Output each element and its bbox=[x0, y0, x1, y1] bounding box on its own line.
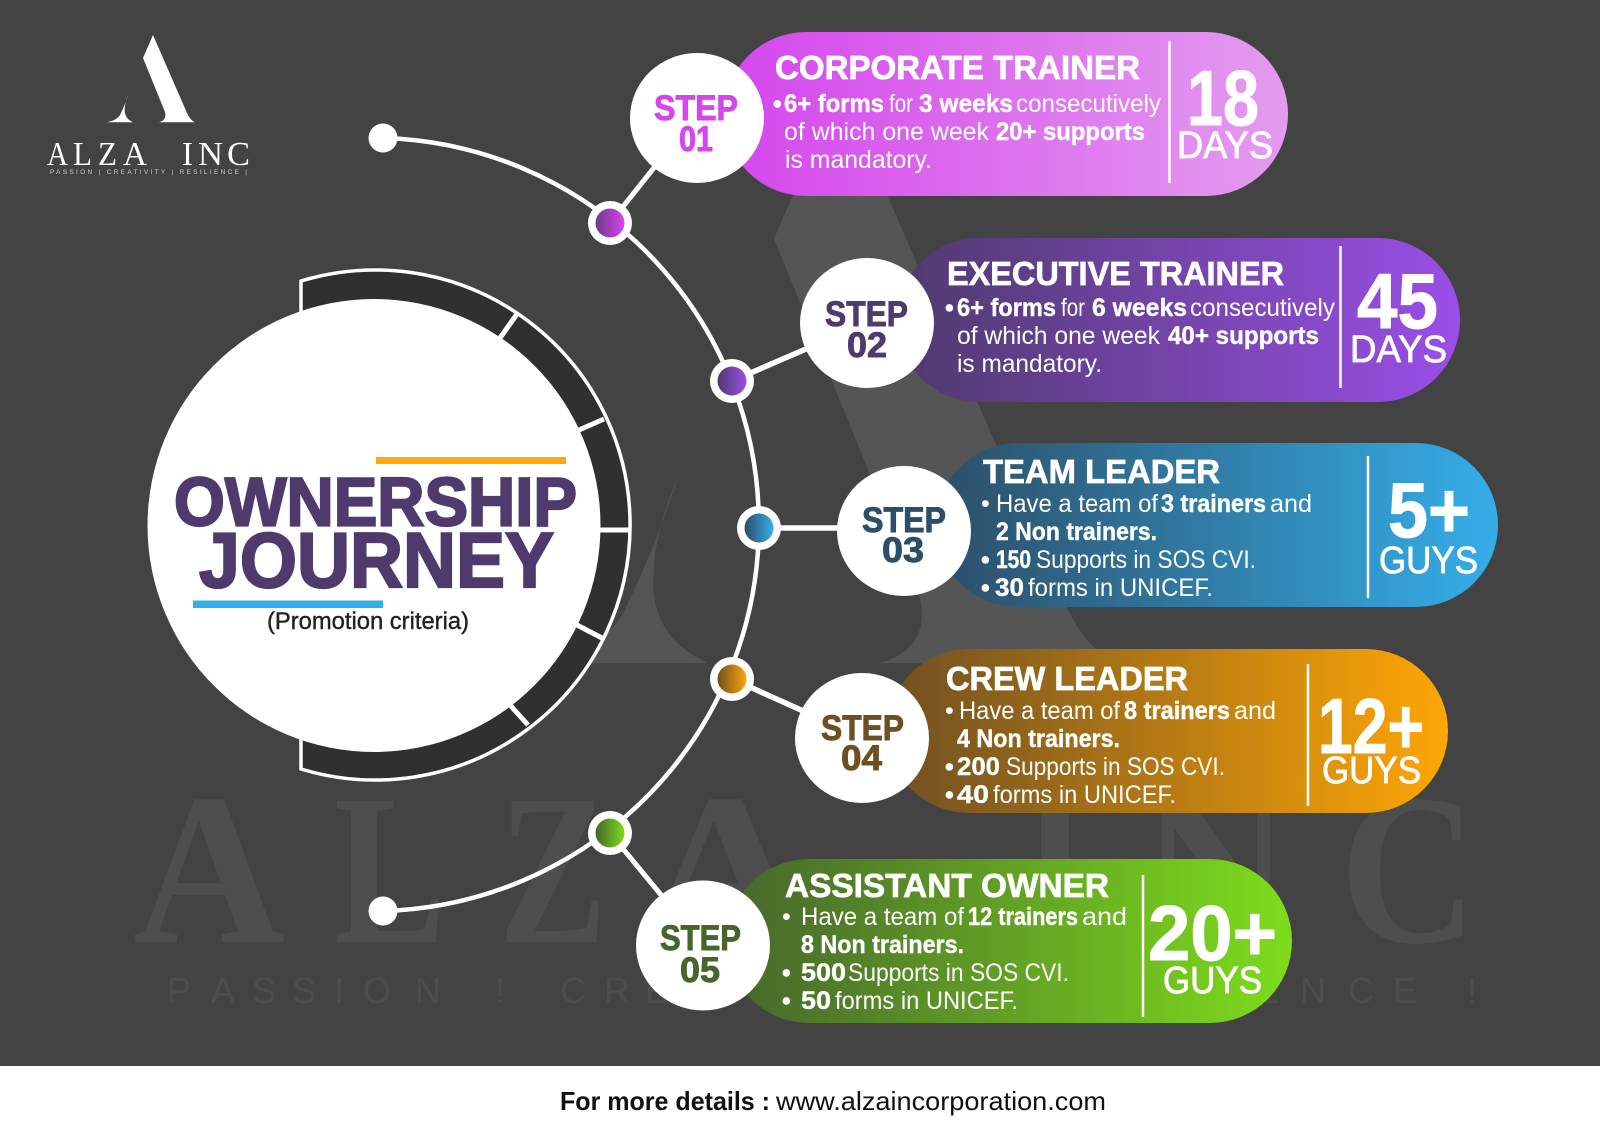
step badge bbox=[630, 53, 764, 183]
criteria text: for bbox=[1061, 294, 1085, 322]
step badge: 04 bbox=[841, 739, 883, 778]
logo: Alza Inc bbox=[47, 35, 250, 176]
criteria text: of which one week bbox=[957, 322, 1160, 350]
accent bar: orange bbox=[376, 457, 566, 464]
step badge: 02 bbox=[847, 326, 887, 365]
criteria text: for bbox=[889, 90, 913, 118]
criteria text: Have a team of bbox=[959, 697, 1120, 725]
logo mark bbox=[107, 35, 195, 122]
metric: 45 days bbox=[1350, 257, 1447, 371]
step badge: STEP bbox=[654, 89, 738, 128]
title: OWNERSHIP bbox=[174, 464, 577, 540]
watermark: tagline: PASSION ! CREATIVITY ! RESILIENCE ! bbox=[167, 970, 1477, 1011]
criteria text: Supports in SOS CVI. bbox=[1006, 753, 1225, 781]
heading: CORPORATE TRAINER bbox=[775, 49, 1140, 86]
criteria text: Supports in SOS CVI. bbox=[848, 959, 1069, 987]
logo wordmark bbox=[47, 136, 250, 173]
criteria text: Have a team of bbox=[996, 490, 1158, 518]
criteria text: 40+ supports bbox=[1168, 322, 1319, 350]
criteria text: 6 weeks bbox=[1092, 294, 1187, 322]
connector: step 2 bbox=[732, 330, 850, 381]
connector: step 3 bbox=[759, 525, 880, 531]
step badge: STEP bbox=[821, 709, 904, 748]
criteria text: and bbox=[1270, 490, 1312, 518]
criteria text: is mandatory. bbox=[785, 146, 932, 174]
divider bbox=[1339, 246, 1342, 388]
node: step 2 bbox=[710, 359, 754, 403]
criteria text: consecutively bbox=[1016, 90, 1161, 118]
metric: 5+ guys: 5+ bbox=[1388, 466, 1470, 554]
metric: 18 days: 18 bbox=[1187, 54, 1259, 142]
watermark: ALZA INC wordmark: N bbox=[1140, 750, 1290, 989]
criteria text: forms in UNICEF. bbox=[835, 987, 1018, 1015]
watermark: ALZA INC wordmark bbox=[133, 750, 1477, 989]
divider bbox=[1367, 456, 1369, 598]
segmented ring around central circle bbox=[301, 270, 630, 780]
criteria text: 30 bbox=[995, 574, 1024, 602]
criteria text: and bbox=[1234, 697, 1276, 725]
heading: TEAM LEADER bbox=[983, 453, 1220, 490]
criteria text: 3 trainers bbox=[1161, 490, 1266, 518]
criteria text: Supports in SOS CVI. bbox=[1036, 546, 1256, 574]
step badge: STEP bbox=[862, 501, 946, 540]
criteria text: is mandatory. bbox=[957, 350, 1102, 378]
pill background bbox=[897, 238, 1460, 402]
criteria text: 40 bbox=[957, 781, 989, 809]
node: step 1 bbox=[588, 201, 632, 245]
criteria text: Have a team of bbox=[801, 903, 964, 931]
criteria text: 150 bbox=[996, 546, 1031, 574]
step badge bbox=[636, 880, 770, 1010]
criteria text: • bbox=[782, 903, 791, 931]
metric: 20+ guys: GUYS bbox=[1163, 960, 1262, 1002]
criteria text: 50 bbox=[801, 987, 831, 1015]
step badge: STEP bbox=[660, 919, 741, 958]
title bbox=[174, 464, 577, 604]
logo wordmark: A bbox=[47, 136, 68, 173]
criteria text bbox=[945, 697, 1276, 809]
heading: CREW LEADER bbox=[946, 660, 1188, 697]
pill background bbox=[936, 443, 1498, 607]
pill background bbox=[887, 649, 1448, 813]
criteria text: • bbox=[981, 546, 990, 574]
connector: step 1 bbox=[610, 135, 680, 223]
criteria text: 6+ forms bbox=[784, 90, 884, 118]
metric: 20+ guys: 20+ bbox=[1148, 889, 1277, 977]
logo wordmark: C bbox=[227, 136, 250, 173]
logo wordmark: Z bbox=[98, 136, 117, 173]
step badge bbox=[837, 466, 971, 596]
criteria text: 12 trainers bbox=[968, 903, 1078, 931]
node: step 5 bbox=[588, 811, 632, 855]
metric: 18 days: DAYS bbox=[1177, 125, 1273, 167]
connector: step 4 bbox=[732, 679, 850, 732]
panel: step 3 team leader bbox=[837, 443, 1498, 607]
title: JOURNEY bbox=[199, 516, 554, 604]
criteria text bbox=[981, 490, 1312, 602]
step badge: STEP bbox=[825, 295, 908, 334]
criteria text: 4 Non trainers. bbox=[957, 725, 1120, 753]
criteria text: and bbox=[1082, 903, 1127, 931]
criteria text: 3 weeks bbox=[919, 90, 1013, 118]
logo wordmark: L bbox=[73, 136, 92, 173]
criteria text: • bbox=[782, 987, 791, 1015]
criteria text: 20+ supports bbox=[996, 118, 1145, 146]
logo tagline: PASSION | CREATIVITY | RESILIENCE | bbox=[50, 169, 247, 176]
criteria text: • bbox=[782, 959, 791, 987]
logo wordmark: I bbox=[182, 136, 193, 173]
metric: 45 days: 45 bbox=[1357, 257, 1438, 345]
criteria text: • bbox=[945, 753, 954, 781]
step badge bbox=[800, 258, 934, 388]
step badge: 03 bbox=[882, 531, 924, 570]
criteria text: 8 trainers bbox=[1124, 697, 1230, 725]
arc end dot: top bbox=[368, 124, 398, 152]
criteria text: • bbox=[981, 574, 990, 602]
criteria text bbox=[773, 90, 1161, 174]
criteria text: consecutively bbox=[1190, 294, 1335, 322]
logo wordmark: A bbox=[123, 136, 147, 173]
timeline arc bbox=[383, 138, 759, 911]
watermark: ALZA INC wordmark: Z bbox=[499, 750, 607, 989]
panel: step 5 assistant owner bbox=[636, 859, 1292, 1023]
arc end dot: bottom bbox=[368, 896, 398, 926]
metric: 12+ guys bbox=[1318, 682, 1424, 792]
metric: 45 days: DAYS bbox=[1350, 329, 1447, 371]
step badge: 05 bbox=[680, 951, 720, 990]
heading: EXECUTIVE TRAINER bbox=[947, 255, 1284, 292]
metric: 5+ guys bbox=[1379, 466, 1478, 582]
criteria text: • bbox=[945, 697, 954, 725]
criteria text: forms in UNICEF. bbox=[993, 781, 1176, 809]
panel: step 4 crew leader bbox=[795, 649, 1448, 813]
footer text: For more details : bbox=[560, 1086, 770, 1116]
node: step 4 bbox=[710, 657, 754, 701]
divider bbox=[1307, 664, 1309, 806]
panel: step 1 corporate trainer bbox=[630, 32, 1288, 196]
criteria text: 500 bbox=[801, 959, 846, 987]
criteria text: • bbox=[945, 781, 954, 809]
criteria text: 200 bbox=[957, 753, 1000, 781]
metric: 12+ guys: GUYS bbox=[1322, 750, 1421, 792]
criteria text bbox=[782, 903, 1127, 1015]
watermark: ALZA INC wordmark: C bbox=[1340, 750, 1477, 989]
criteria text: forms in UNICEF. bbox=[1028, 574, 1213, 602]
footer text: www.alzaincorporation.com bbox=[775, 1086, 1106, 1116]
criteria text: • bbox=[981, 490, 990, 518]
footer band bbox=[0, 1066, 1600, 1131]
panel: step 2 executive trainer bbox=[800, 238, 1460, 402]
watermark: ALZA INC wordmark: I bbox=[1020, 750, 1090, 989]
heading: ASSISTANT OWNER bbox=[785, 867, 1109, 904]
metric: 18 days bbox=[1177, 54, 1273, 167]
criteria text: 2 Non trainers. bbox=[996, 518, 1157, 546]
divider bbox=[1168, 41, 1171, 183]
step badge: 01 bbox=[679, 120, 713, 159]
metric: 12+ guys: 12+ bbox=[1318, 682, 1424, 770]
divider bbox=[1142, 875, 1144, 1017]
criteria text: • bbox=[945, 294, 954, 322]
criteria text bbox=[945, 294, 1335, 378]
footer text bbox=[560, 1086, 1106, 1116]
subtitle: (Promotion criteria) bbox=[267, 608, 469, 635]
criteria text: • bbox=[773, 90, 782, 118]
metric: 5+ guys: GUYS bbox=[1379, 540, 1478, 582]
watermark: large A mark bbox=[536, 87, 1117, 663]
step badge bbox=[795, 673, 929, 803]
node: step 3 bbox=[737, 506, 781, 550]
criteria text: of which one week bbox=[784, 118, 989, 146]
criteria text: 8 Non trainers. bbox=[801, 931, 964, 959]
watermark: ALZA INC wordmark: A bbox=[640, 750, 810, 989]
accent bar: blue bbox=[193, 600, 383, 608]
pill background bbox=[724, 32, 1288, 196]
watermark: ALZA INC wordmark: L bbox=[334, 750, 446, 989]
logo wordmark: N bbox=[198, 136, 223, 173]
criteria text: 6+ forms bbox=[957, 294, 1056, 322]
central white circle bbox=[148, 299, 600, 752]
pill background bbox=[727, 859, 1292, 1023]
watermark: ALZA INC wordmark: A bbox=[133, 750, 285, 989]
connector: step 5 bbox=[610, 833, 690, 930]
